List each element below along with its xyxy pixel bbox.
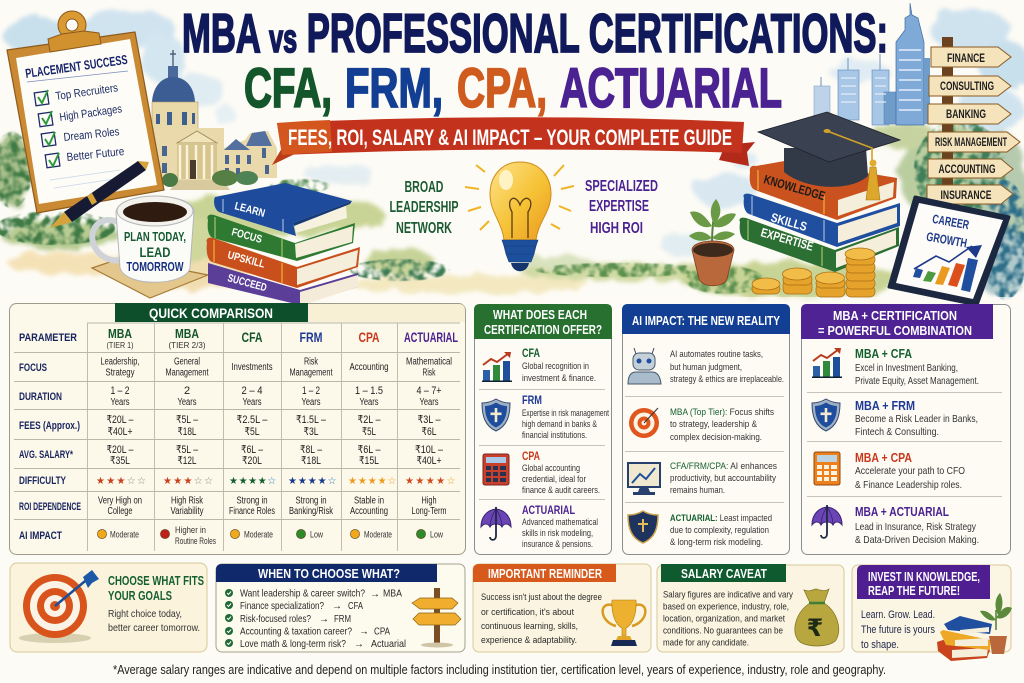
row: ai impact: Moderate bbox=[110, 530, 139, 540]
item: frm bbox=[482, 393, 609, 441]
row: focus: Risk bbox=[304, 356, 319, 368]
row: roi dependence: Strong in bbox=[236, 496, 268, 506]
item: cpa: credential, ideal for bbox=[522, 474, 586, 485]
row: difficulty stars: ★★★☆☆ bbox=[96, 476, 147, 487]
coaster bbox=[92, 258, 208, 298]
row: fees bbox=[106, 414, 441, 438]
checklist bbox=[34, 90, 60, 168]
item: actuarial: & long-term risk modeling. bbox=[670, 537, 763, 548]
body text: location, organization, and market bbox=[663, 614, 785, 624]
row: duration: 2 – 4 bbox=[242, 385, 262, 397]
heading: SALARY CAVEAT bbox=[681, 567, 767, 581]
clipboard: placement success: High Packages bbox=[59, 103, 123, 124]
item: frm: financial institutions. bbox=[522, 430, 587, 441]
row: roi dependence: Strong in bbox=[296, 496, 326, 506]
mug: plan today, lead tomorrow: LEAD bbox=[140, 244, 170, 260]
book: expertise bbox=[739, 218, 899, 272]
row: fees: ₹5L bbox=[244, 426, 260, 438]
book: expertise: EXPERTISE bbox=[759, 225, 815, 254]
column headers: MBA bbox=[175, 326, 199, 341]
item: routine tasks bbox=[628, 348, 784, 385]
item: mba actuarial: Lead in Insurance, Risk Strategy bbox=[855, 521, 977, 533]
column headers: CPA bbox=[358, 329, 380, 345]
title: FRM, bbox=[345, 56, 443, 119]
item: routine tasks: but human judgment, bbox=[670, 362, 742, 373]
row: duration: 1 – 2 bbox=[110, 385, 130, 397]
row: average salary: ₹12L bbox=[178, 455, 196, 467]
sign: insurance bbox=[927, 185, 1013, 204]
item: mba cfa: Private Equity, Asset Management. bbox=[855, 375, 979, 387]
sign: risk management bbox=[928, 132, 1020, 152]
book stack right bbox=[739, 112, 900, 272]
title: ACTUARIAL bbox=[560, 56, 782, 119]
heading bbox=[857, 565, 990, 599]
body text: conditions. No guarantees can be bbox=[663, 626, 783, 636]
item: mba cfa: Excel in Investment Banking, bbox=[855, 362, 958, 374]
column headers bbox=[106, 326, 458, 350]
column headers: ACTUARIAL bbox=[404, 329, 458, 345]
row: fees: ₹2.5L – bbox=[236, 414, 268, 426]
item: mba cpa bbox=[814, 450, 965, 491]
checklist: Finance specialization? bbox=[240, 600, 324, 612]
row: difficulty stars: ★★★★☆ bbox=[288, 476, 337, 487]
panel: what does each certification offer bbox=[474, 304, 612, 554]
book: knowledge: KNOWLEDGE bbox=[762, 172, 827, 203]
ribbon subtitle bbox=[272, 117, 755, 166]
clipboard: placement success: Dream Roles bbox=[63, 126, 120, 144]
text: broad leadership network bbox=[390, 179, 458, 237]
item: cfa frm cpa: productivity, but accountability bbox=[670, 473, 776, 484]
checklist: Want leadership & career switch? bbox=[240, 588, 365, 600]
icon: target bbox=[19, 570, 99, 643]
heading: WHAT DOES EACH bbox=[493, 308, 587, 322]
row: duration: Years bbox=[178, 397, 196, 408]
icon: pen bbox=[50, 161, 149, 228]
book: succeed: SUCCEED bbox=[226, 272, 268, 294]
sign: accounting: ACCOUNTING bbox=[938, 162, 996, 176]
clipboard: placement success bbox=[7, 11, 164, 213]
book stack left bbox=[207, 183, 360, 306]
item: cpa: Global accounting bbox=[522, 463, 580, 474]
sign: banking: BANKING bbox=[946, 107, 986, 121]
row: difficulty stars: ★★★★☆ bbox=[405, 476, 457, 487]
body text: made for any candidate. bbox=[663, 638, 749, 648]
row: average salary: ₹18L bbox=[301, 455, 321, 467]
body text: Learn. Grow. Lead. bbox=[861, 609, 935, 621]
row: fees: ₹18L bbox=[178, 426, 196, 438]
row: average salary: ₹5L – bbox=[176, 444, 199, 456]
row: average salary: ₹15L bbox=[359, 455, 379, 467]
heading: AI IMPACT: THE NEW REALITY bbox=[632, 313, 780, 328]
column headers: CFA bbox=[242, 329, 262, 345]
book: upskill: UPSKILL bbox=[226, 249, 266, 271]
sign: finance: FINANCE bbox=[947, 51, 985, 65]
panel: important reminder bbox=[473, 564, 651, 652]
text: specialized expertise high roi: EXPERTISE bbox=[589, 198, 649, 215]
footnote: *Average salary ranges are indicative and depend on multiple factors including institution tier, certification level, years of experience, industry, role and geography. bbox=[113, 663, 886, 677]
row: focus: Management bbox=[166, 368, 209, 378]
row labels bbox=[19, 332, 81, 542]
body text bbox=[663, 590, 793, 648]
signpost: career directions bbox=[927, 37, 1020, 204]
sign: accounting bbox=[928, 159, 1013, 178]
row: duration: Years bbox=[420, 397, 438, 408]
row: fees: ₹6L bbox=[422, 426, 436, 438]
clipboard: placement success: Top Recruiters bbox=[55, 82, 119, 103]
body text bbox=[861, 609, 935, 651]
body text: based on experience, industry, role, bbox=[663, 602, 789, 612]
row: difficulty stars bbox=[96, 476, 457, 487]
item: cpa: CPA bbox=[522, 449, 540, 463]
item: cpa bbox=[483, 449, 600, 496]
row: roi dependence: Finance Roles bbox=[229, 506, 275, 517]
row: duration: 1 – 2 bbox=[302, 385, 320, 397]
row: duration: Years bbox=[242, 397, 262, 408]
item: routine tasks: AI automates routine tasks, bbox=[670, 349, 763, 360]
icon: money bag: ₹ bbox=[807, 615, 823, 642]
item: actuarial: skills in risk modeling, bbox=[522, 528, 593, 539]
item: mba top tier: MBA (Top Tier): Focus shifts bbox=[670, 407, 774, 418]
building bbox=[152, 50, 277, 190]
row: focus: General bbox=[174, 356, 200, 368]
row: roi dependence: College bbox=[108, 506, 133, 517]
mug: plan today, lead tomorrow: PLAN TODAY, bbox=[124, 230, 186, 244]
row: average salary: ₹35L bbox=[110, 455, 130, 467]
mug: plan today, lead tomorrow bbox=[92, 196, 194, 282]
item: frm: FRM bbox=[522, 393, 542, 407]
item: mba top tier: complex decision-making. bbox=[670, 432, 762, 443]
item: cfa bbox=[482, 346, 596, 384]
row: duration bbox=[110, 385, 442, 408]
row: average salary: ₹6L – bbox=[241, 444, 264, 456]
row: focus: Strategy bbox=[106, 368, 134, 378]
row: focus: Accounting bbox=[350, 362, 388, 373]
book: skills: SKILLS bbox=[769, 210, 809, 234]
row: focus bbox=[100, 356, 452, 378]
ribbon subtitle: FEES, ROI, SALARY & AI IMPACT – YOUR COMPLETE GUIDE bbox=[288, 125, 732, 150]
column headers: (TIER 1) bbox=[106, 340, 134, 350]
sign: insurance: INSURANCE bbox=[940, 188, 992, 202]
item: actuarial bbox=[628, 511, 772, 548]
row: difficulty stars: ★★★★☆ bbox=[229, 476, 277, 487]
heading: = POWERFUL COMBINATION bbox=[818, 323, 972, 338]
item: frm: high demand in banks & bbox=[522, 419, 597, 430]
heading bbox=[622, 304, 790, 334]
item: mba top tier bbox=[629, 407, 774, 443]
row: duration: 1 – 1.5 bbox=[355, 385, 383, 397]
item: cfa: CFA bbox=[522, 346, 540, 360]
row: ai impact bbox=[97, 525, 443, 547]
item: actuarial: Advanced mathematical bbox=[522, 517, 598, 528]
row: fees: ₹1.5L – bbox=[296, 414, 327, 426]
book: knowledge bbox=[750, 160, 897, 220]
icon: trophy bbox=[603, 600, 645, 646]
icon: potted plant bbox=[689, 199, 736, 286]
body text bbox=[481, 592, 602, 646]
item: frm: Expertise in risk management bbox=[522, 408, 609, 419]
hero illustration backdrop bbox=[0, 8, 1024, 304]
item: mba actuarial: MBA + ACTUARIAL bbox=[855, 504, 949, 519]
body text: Salary figures are indicative and vary bbox=[663, 590, 793, 600]
body text: Right choice today, bbox=[108, 608, 182, 620]
title: CFA, bbox=[244, 56, 332, 119]
row: roi dependence: High Risk bbox=[171, 496, 204, 506]
clipboard board bbox=[7, 32, 164, 213]
heading: INVEST IN KNOWLEDGE, bbox=[868, 570, 980, 584]
heading: REAP THE FUTURE! bbox=[868, 584, 960, 598]
item: mba cfa bbox=[812, 346, 979, 387]
item: actuarial bbox=[481, 503, 598, 550]
row: ai impact: Moderate bbox=[364, 530, 392, 540]
row labels: FEES (Approx.) bbox=[19, 420, 80, 432]
heading: CHOOSE WHAT FITS bbox=[108, 574, 204, 588]
row: roi dependence: Very High on bbox=[98, 496, 142, 506]
heading bbox=[801, 304, 993, 339]
item: mba cpa: MBA + CPA bbox=[855, 450, 912, 465]
checklist: → bbox=[332, 601, 342, 612]
row: average salary: ₹6L – bbox=[358, 444, 381, 456]
row: duration: 2 bbox=[184, 385, 190, 397]
row: average salary: ₹8L – bbox=[300, 444, 323, 456]
row: roi dependence: Accounting bbox=[350, 506, 388, 517]
heading: quick comparison bbox=[115, 303, 308, 322]
item: actuarial: due to complexity, regulation bbox=[670, 525, 769, 536]
checklist: FRM bbox=[334, 613, 351, 625]
row: roi dependence: Long-Term bbox=[412, 506, 446, 517]
row labels: FOCUS bbox=[19, 362, 47, 374]
item: mba frm: Become a Risk Leader in Banks, bbox=[855, 413, 978, 425]
item: mba top tier: to strategy, leadership & bbox=[670, 419, 758, 430]
heading: quick comparison: QUICK COMPARISON bbox=[149, 306, 273, 321]
checklist: Actuarial bbox=[371, 638, 406, 650]
book: learn: LEARN bbox=[233, 200, 266, 220]
row: duration: Years bbox=[302, 397, 320, 408]
skyline bbox=[814, 3, 930, 125]
row: roi dependence: Variability bbox=[170, 506, 204, 517]
row: focus: Management bbox=[290, 368, 333, 378]
row: average salary: ₹10L – bbox=[415, 444, 444, 456]
book: learn bbox=[214, 183, 352, 236]
heading bbox=[661, 564, 786, 582]
row: focus: Leadership, bbox=[100, 356, 140, 368]
item: cfa frm cpa: CFA/FRM/CPA: AI enhances bbox=[670, 461, 777, 472]
heading: WHEN TO CHOOSE WHAT? bbox=[258, 566, 400, 581]
row: fees: ₹5L bbox=[362, 426, 376, 438]
body text: The future is yours bbox=[861, 624, 935, 636]
item: routine tasks: strategy & ethics are irreplaceable. bbox=[670, 374, 784, 385]
item: mba cpa: Accelerate your path to CFO bbox=[855, 465, 965, 477]
text: broad leadership network: NETWORK bbox=[396, 220, 453, 237]
body text: to shape. bbox=[861, 639, 899, 651]
body text: better career tomorrow. bbox=[108, 622, 200, 634]
row: ai impact: Higher in bbox=[175, 525, 206, 536]
row labels: DURATION bbox=[19, 391, 62, 403]
row labels: DIFFICULTY bbox=[19, 475, 66, 487]
row labels: PARAMETER bbox=[19, 332, 77, 344]
item: actuarial: ACTUARIAL: Least impacted bbox=[670, 513, 772, 524]
checklist: → bbox=[359, 626, 369, 638]
column headers: (TIER 2/3) bbox=[168, 340, 206, 350]
row: roi dependence: High bbox=[422, 496, 436, 506]
heading line 2: YOUR GOALS bbox=[108, 589, 172, 603]
checklist: Risk-focused roles? bbox=[240, 613, 311, 625]
panel: quick comparison table bbox=[10, 303, 466, 554]
row: average salary: ₹40L+ bbox=[416, 455, 442, 467]
heading bbox=[474, 304, 612, 339]
item: actuarial: ACTUARIAL bbox=[522, 503, 575, 517]
row labels: AI IMPACT bbox=[19, 530, 62, 542]
item: mba frm bbox=[812, 398, 978, 438]
body text: continuous learning, skills, bbox=[481, 621, 578, 632]
tablet: career growth: GROWTH bbox=[925, 230, 968, 251]
icon: books and plant bbox=[937, 593, 1012, 661]
clip bbox=[48, 11, 101, 52]
row: fees: ₹40L+ bbox=[108, 426, 132, 438]
checklist: → bbox=[354, 639, 364, 650]
book: upskill bbox=[207, 238, 360, 288]
row: average salary: ₹20L – bbox=[106, 444, 134, 456]
item: mba frm: MBA + FRM bbox=[855, 398, 915, 413]
heading bbox=[216, 564, 437, 582]
text: broad leadership network: BROAD bbox=[404, 179, 444, 196]
book: focus bbox=[207, 215, 355, 261]
paper bbox=[16, 39, 157, 204]
row labels: AVG. SALARY* bbox=[19, 449, 73, 461]
row: fees: ₹3L – bbox=[418, 414, 441, 426]
checklist: CPA bbox=[374, 626, 390, 638]
panel: ai impact the new reality bbox=[622, 304, 790, 554]
panel: invest in knowledge bbox=[852, 565, 1012, 661]
text: specialized expertise high roi bbox=[585, 178, 658, 237]
tablet: career growth: CAREER bbox=[931, 212, 970, 232]
row labels: ROI DEPENDENCE bbox=[19, 501, 81, 513]
heading: MBA + CERTIFICATION bbox=[833, 308, 957, 323]
row: average salary: ₹20L bbox=[242, 455, 262, 467]
panel: salary caveat bbox=[657, 564, 844, 652]
row: fees: ₹3L bbox=[304, 426, 318, 438]
checklist: Love math & long-term risk? bbox=[240, 638, 346, 650]
row: fees: ₹20L – bbox=[106, 414, 134, 426]
item: cpa: finance & audit careers. bbox=[522, 485, 600, 496]
row: difficulty stars: ★★★★☆ bbox=[348, 476, 397, 487]
icon: money bag bbox=[795, 589, 839, 646]
row: difficulty stars: ★★★☆☆ bbox=[163, 476, 214, 487]
item: cfa frm cpa bbox=[628, 461, 777, 496]
item: mba frm: Fintech & Consulting. bbox=[855, 426, 939, 438]
checklist: MBA bbox=[383, 588, 402, 600]
row: ai impact: Low bbox=[430, 530, 443, 540]
row: fees: ₹5L – bbox=[176, 414, 199, 426]
sign: finance bbox=[931, 47, 1011, 67]
item: cfa: investment & finance. bbox=[522, 373, 596, 384]
item: mba actuarial: & Data-Driven Decision Making. bbox=[855, 534, 979, 546]
icon: graduation cap bbox=[758, 112, 900, 200]
panel: when to choose what bbox=[216, 564, 465, 652]
item: mba actuarial bbox=[812, 504, 979, 546]
item: mba cfa: MBA + CFA bbox=[855, 346, 912, 361]
item: mba cpa: & Finance Leadership roles. bbox=[855, 479, 962, 491]
book: skills bbox=[743, 194, 900, 247]
heading bbox=[473, 564, 616, 582]
clipboard: placement success: Better Future bbox=[66, 146, 125, 164]
item: cfa: Global recognition in bbox=[522, 361, 589, 372]
row: ai impact: Moderate bbox=[244, 530, 273, 540]
heading: IMPORTANT REMINDER bbox=[488, 567, 602, 581]
row: ai impact: Routine Roles bbox=[175, 536, 216, 547]
panel: choose what fits your goals bbox=[10, 563, 207, 652]
checklist: → bbox=[319, 614, 329, 625]
checklist: Accounting & taxation career? bbox=[240, 626, 352, 638]
tablet: career growth bbox=[889, 197, 1009, 305]
icon: light bulb bbox=[465, 162, 574, 271]
item: cfa frm cpa: remains human. bbox=[670, 485, 725, 496]
table grid bbox=[14, 323, 460, 551]
row: ai impact: Low bbox=[310, 530, 323, 540]
checklist: → bbox=[370, 589, 380, 600]
body text: Success isn't just about the degree bbox=[481, 592, 602, 603]
clipboard heading: PLACEMENT SUCCESS bbox=[24, 52, 129, 81]
checklist bbox=[225, 588, 406, 650]
row: average salary bbox=[106, 444, 444, 467]
row: duration: 4 – 7+ bbox=[416, 385, 442, 397]
panel: mba plus certification bbox=[801, 304, 1010, 554]
heading: CERTIFICATION OFFER? bbox=[484, 323, 602, 337]
row: duration: Years bbox=[360, 397, 378, 408]
item: actuarial: insurance & pensions. bbox=[522, 539, 593, 550]
body text: or certification, it's about bbox=[481, 607, 574, 618]
row: roi dependence: Banking/Risk bbox=[289, 506, 334, 517]
row: fees: ₹2L – bbox=[358, 414, 381, 426]
icon: signpost bbox=[412, 588, 461, 648]
title: CPA, bbox=[457, 56, 547, 119]
row: duration: Years bbox=[110, 397, 130, 408]
sign: consulting: CONSULTING bbox=[940, 79, 994, 93]
checklist: CFA bbox=[348, 600, 363, 612]
row: focus: Risk bbox=[422, 368, 436, 378]
row: roi dependence bbox=[98, 496, 446, 517]
column headers: FRM bbox=[300, 329, 322, 345]
text: specialized expertise high roi: HIGH ROI bbox=[590, 220, 643, 237]
text: specialized expertise high roi: SPECIALIZED bbox=[585, 178, 658, 195]
book: succeed bbox=[208, 263, 358, 306]
coins bbox=[752, 248, 875, 297]
text: broad leadership network: LEADERSHIP bbox=[390, 199, 458, 216]
body text bbox=[108, 608, 200, 634]
row: focus: Mathematical bbox=[406, 356, 452, 368]
mug: plan today, lead tomorrow: TOMORROW bbox=[126, 260, 184, 274]
sign: banking bbox=[928, 104, 1011, 124]
sign: consulting bbox=[929, 76, 1011, 96]
column headers: MBA bbox=[108, 326, 132, 341]
book: focus: FOCUS bbox=[230, 226, 263, 246]
row: roi dependence: Stable in bbox=[354, 496, 384, 506]
row: focus: Investments bbox=[232, 362, 272, 373]
body text: experience & adaptability. bbox=[481, 635, 577, 646]
title bbox=[182, 2, 888, 119]
